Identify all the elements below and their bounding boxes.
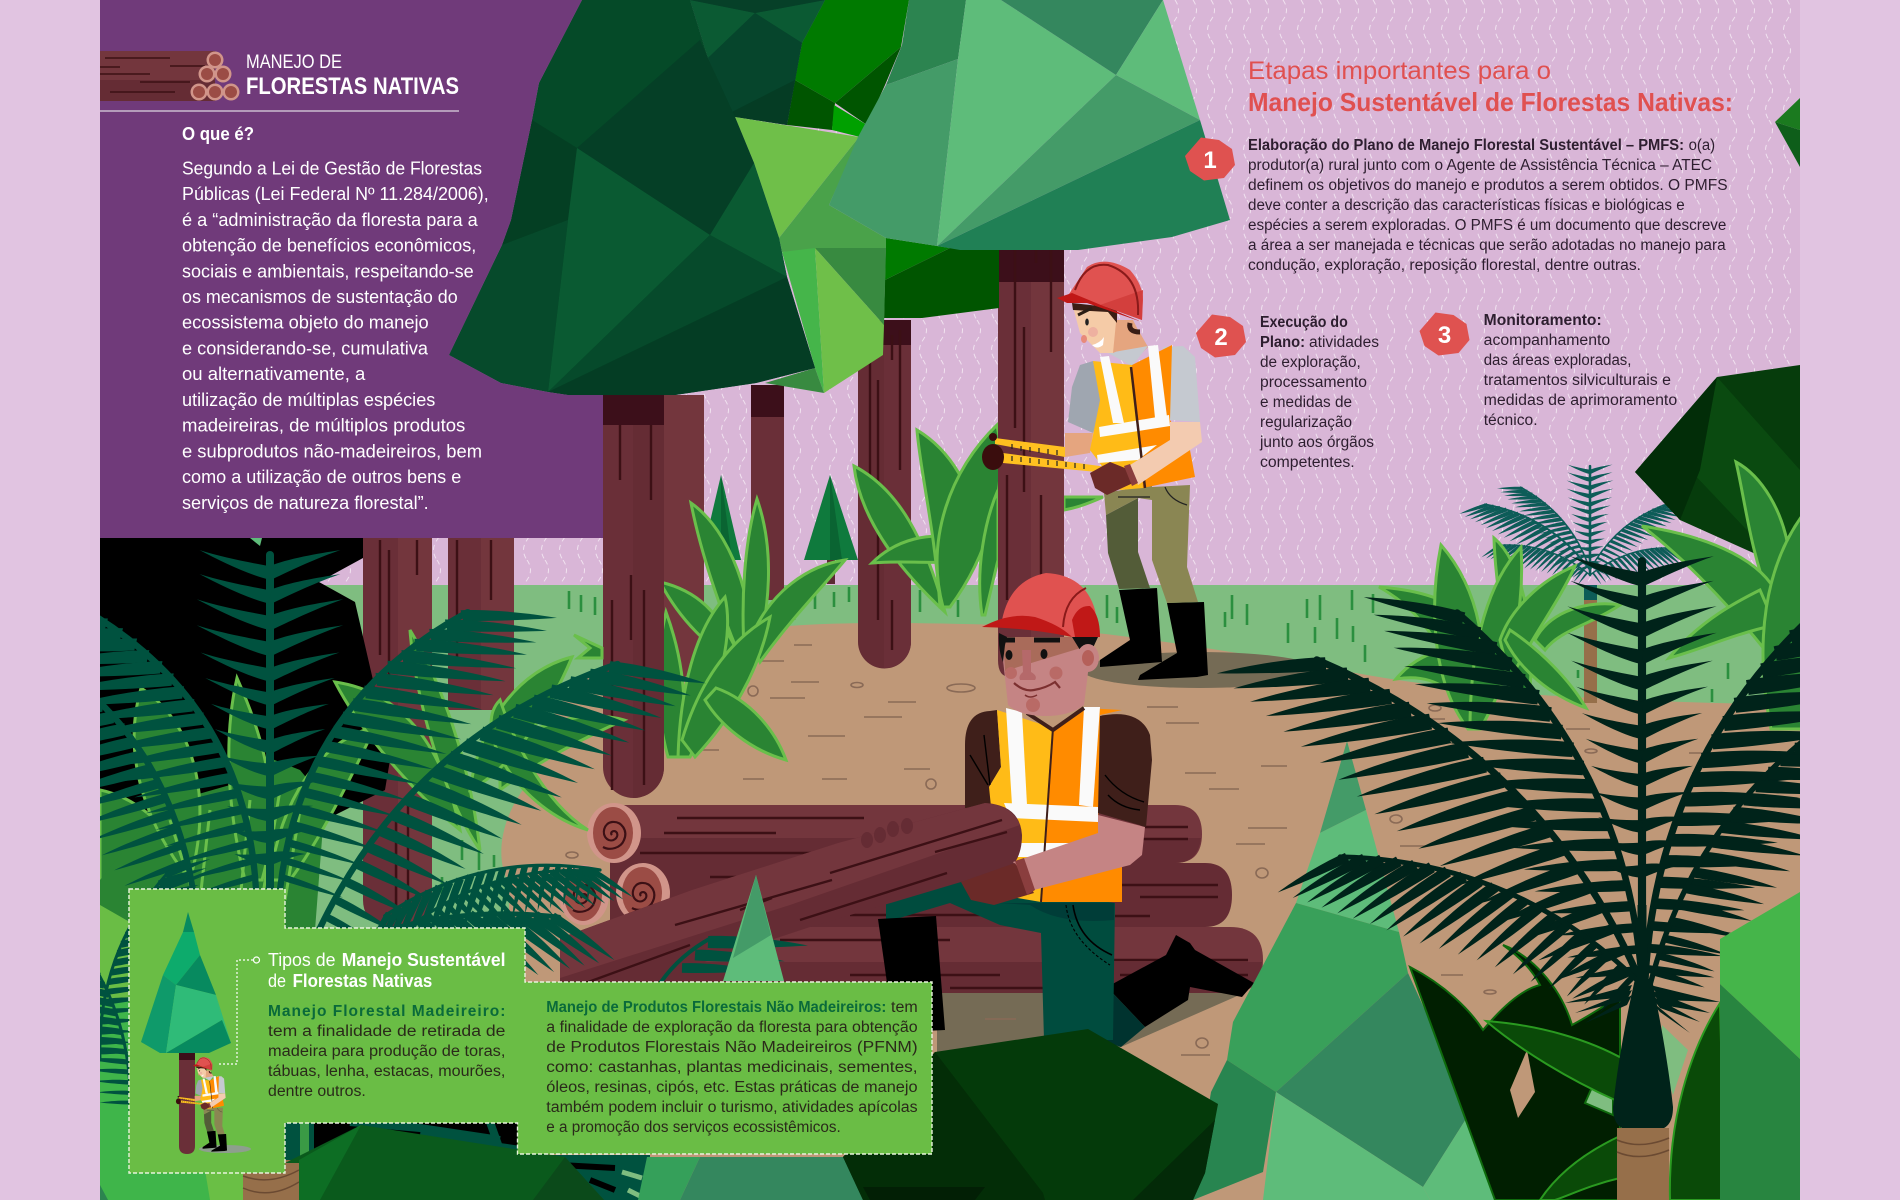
plant bottom right xyxy=(1670,1003,1725,1200)
trousers xyxy=(1104,485,1198,603)
header title: MANEJO DE xyxy=(246,52,342,73)
definition text: como a utilização de outros bens e xyxy=(182,467,461,487)
timber management text xyxy=(268,1003,505,1100)
green polygon tree right corner xyxy=(1720,892,1800,1200)
sleeve creases xyxy=(970,735,1144,810)
left sleeve xyxy=(1068,361,1103,433)
trousers xyxy=(886,880,1115,1040)
step 2 text: competentes. xyxy=(1260,454,1355,471)
definition text: sociais e ambientais, respeitando-se xyxy=(182,261,474,281)
cone tree center xyxy=(723,875,784,981)
non-timber management text: óleos, resinas, cipós, etc. Estas práticas de manejo xyxy=(546,1079,918,1096)
definition text: e subprodutos não-madeireiros, bem xyxy=(182,441,482,461)
non-timber management text: de Produtos Florestais Não Madeireiros (PFNM) xyxy=(546,1039,918,1056)
step 2 text: junto aos órgãos xyxy=(1259,434,1374,451)
badge 3 xyxy=(1420,312,1470,356)
badge 1: 1 xyxy=(1203,147,1217,174)
definition text: madeireiras, de múltiplos produtos xyxy=(182,416,465,436)
forearm xyxy=(1013,815,1145,890)
right sleeve xyxy=(1098,714,1152,827)
light tree bottom xyxy=(638,1157,865,1200)
back trunks left xyxy=(363,537,514,927)
step 1 text: definem os objetivos do manejo e produtos a serem obtidos. O PMFS xyxy=(1248,177,1728,194)
step 3 text: medidas de aprimoramento xyxy=(1484,392,1677,409)
box title xyxy=(268,950,506,991)
badge 1 xyxy=(1185,138,1235,180)
step 1 text xyxy=(1248,137,1728,274)
dark green tree bottom xyxy=(285,1125,604,1200)
worker ground shadow xyxy=(1082,652,1318,688)
timber management text: tem a finalidade de retirada de xyxy=(268,1023,505,1040)
left arm xyxy=(1065,433,1093,457)
definition text: Segundo a Lei de Gestão de Florestas xyxy=(182,158,482,178)
step 3 text xyxy=(1484,312,1677,429)
canopy: dark green tree xyxy=(449,0,815,395)
plants left xyxy=(100,630,624,1040)
definition text: e considerando-se, cumulativa xyxy=(182,338,429,358)
distant palm xyxy=(1458,463,1700,703)
vest xyxy=(989,707,1122,902)
definition text: ecossistema objeto do manejo xyxy=(182,313,429,333)
plant veins xyxy=(170,790,300,900)
step 2 text: de exploração, xyxy=(1260,354,1361,371)
box title: Manejo Sustentável xyxy=(342,950,506,970)
definition text xyxy=(182,158,489,513)
purple background panel xyxy=(100,0,603,538)
trunk: front xyxy=(603,395,664,798)
trunk: big xyxy=(998,250,1064,677)
grass tufts xyxy=(442,587,1728,897)
definition text: ou alternativamente, a xyxy=(182,364,366,384)
trunk: small xyxy=(751,385,784,600)
non-timber management text: também podem incluir o turismo, atividades apícolas xyxy=(546,1099,918,1116)
right fern xyxy=(1210,522,1900,1200)
non-timber management text xyxy=(546,999,918,1136)
panel: types of management xyxy=(129,889,932,1173)
neck xyxy=(1113,333,1148,363)
step 3 text: técnico. xyxy=(1484,412,1538,429)
definition text: os mecanismos de sustentação do xyxy=(182,287,458,307)
panel: what is it xyxy=(100,0,603,538)
trunk: medium xyxy=(858,320,911,668)
log end A xyxy=(587,803,641,863)
heading: o que é: O que é? xyxy=(182,124,254,144)
badge 3: 3 xyxy=(1438,322,1451,349)
header title: FLORESTAS NATIVAS xyxy=(246,73,459,100)
left fern xyxy=(0,544,712,1123)
step 1 text: o(a) xyxy=(1689,137,1715,154)
right arm xyxy=(1130,422,1202,485)
step 1 text: Elaboração do Plano de Manejo Florestal Sustentável – PMFS: xyxy=(1248,137,1684,154)
dark plant lower right xyxy=(1410,945,1625,1200)
plant right middle xyxy=(1379,538,1620,729)
bottom left greens xyxy=(100,905,260,1200)
log stack ground shadow xyxy=(937,993,1237,1052)
black tree xyxy=(100,538,390,814)
grass patch behind palm xyxy=(1660,1025,1688,1095)
step 1 text: deve conter a descrição das características físicas e biológicas e xyxy=(1248,197,1685,214)
step 1 text: produtor(a) rural junto com o Agente de Assistência Técnica – ATEC xyxy=(1248,157,1712,174)
steps heading xyxy=(1248,57,1733,117)
definition text: serviços de natureza florestal”. xyxy=(182,493,429,513)
helmet xyxy=(1057,262,1143,322)
small conifers xyxy=(701,475,858,584)
plant behind trunks xyxy=(658,499,845,760)
kneeling boot xyxy=(1107,935,1254,1027)
canopy: dark teal back tree xyxy=(690,0,825,125)
left glove xyxy=(982,433,1004,470)
definition text: Públicas (Lei Federal Nº 11.284/2006), xyxy=(182,184,489,204)
step 2 text: Plano: xyxy=(1260,334,1305,351)
head xyxy=(999,633,1099,716)
panel: steps xyxy=(1185,57,1733,471)
step 3 text: tratamentos silviculturais e xyxy=(1484,372,1671,389)
step 2 text xyxy=(1259,314,1379,471)
non-timber management text: e a promoção dos serviços ecossistêmicos. xyxy=(546,1119,841,1136)
step 3 text: Monitoramento: xyxy=(1484,312,1602,329)
glove xyxy=(961,858,1035,905)
steps heading: Etapas importantes para o xyxy=(1248,57,1551,85)
measuring tape xyxy=(995,438,1107,472)
definition text: é a “administração da floresta para a xyxy=(182,210,479,230)
non-timber management text: Manejo de Produtos Florestais Não Madeireiros: xyxy=(546,999,886,1016)
boots xyxy=(1100,588,1208,680)
header divider xyxy=(100,110,459,112)
step 3 text: das áreas exploradas, xyxy=(1484,352,1632,369)
box title: de xyxy=(268,971,286,991)
canopy: bright green tree xyxy=(787,0,999,318)
definition text: obtenção de benefícios econômicos, xyxy=(182,236,476,256)
step 2 text: Execução do xyxy=(1260,314,1348,331)
badge 2 xyxy=(1196,314,1246,358)
plant far right xyxy=(1642,462,1815,729)
box title: Tipos de xyxy=(268,950,336,970)
grass field xyxy=(315,585,1764,928)
vest xyxy=(1090,345,1195,490)
step 2 text: atividades xyxy=(1309,334,1379,351)
big green tree lower right xyxy=(1193,741,1495,1200)
log end B left xyxy=(559,865,609,925)
non-timber management text: como: castanhas, plantas medicinais, sementes, xyxy=(546,1059,918,1076)
timber management text: tábuas, lenha, estacas, mourões, xyxy=(268,1063,505,1080)
header title xyxy=(246,52,459,100)
carried log xyxy=(560,803,1022,1010)
definition text: utilização de múltiplas espécies xyxy=(182,390,435,410)
step 1 text: a área a ser manejada e técnicas que serão adotadas no manejo para xyxy=(1248,237,1726,254)
front boot xyxy=(878,916,945,1032)
badge 2: 2 xyxy=(1214,324,1228,351)
log B xyxy=(610,863,1232,927)
ground marks xyxy=(566,645,1707,1055)
dark green tree bottom center xyxy=(843,1029,1218,1200)
non-timber management text: tem xyxy=(891,999,918,1016)
step 3 text: acompanhamento xyxy=(1484,332,1610,349)
icon: log pile header xyxy=(100,51,240,101)
small worker shadow xyxy=(199,1145,251,1153)
log stack xyxy=(559,803,1263,993)
dark tree right xyxy=(1635,365,1800,553)
collar xyxy=(1108,346,1148,366)
step 2 text: regularização xyxy=(1260,414,1352,431)
lower shin xyxy=(1100,987,1145,1047)
step 1 text: condução, exploração, reposição florestal, dentre outras. xyxy=(1248,257,1641,274)
wood trunk bottom xyxy=(243,1160,299,1200)
green stepped box xyxy=(129,889,932,1173)
front worker xyxy=(560,573,1254,1047)
log C xyxy=(600,927,1263,993)
icon: small tree xyxy=(141,912,231,1154)
dotted connector xyxy=(219,957,260,1064)
step 1 text: espécies a serem exploradas. O PMFS é um documento que descreve xyxy=(1248,217,1726,234)
non-timber management text: a finalidade de exploração da floresta para obtenção xyxy=(546,1019,918,1036)
timber management text: dentre outros. xyxy=(268,1083,366,1100)
trunk: behind front xyxy=(664,395,704,690)
right glove xyxy=(1090,462,1138,495)
black gap under box xyxy=(285,1120,650,1200)
small worker xyxy=(176,1057,227,1152)
sky xyxy=(320,0,1800,585)
canopy: front light tree xyxy=(829,0,1230,250)
timber management text: Manejo Florestal Madeireiro: xyxy=(268,1003,505,1020)
plant behind big trunk xyxy=(854,425,1103,615)
right sleeve xyxy=(1163,346,1200,422)
timber management text: madeira para produção de toras, xyxy=(268,1043,505,1060)
steps heading: Manejo Sustentável de Florestas Nativas: xyxy=(1248,87,1733,117)
box title: Florestas Nativas xyxy=(293,971,432,991)
canopy: light green tree xyxy=(735,117,886,393)
worker with measuring tape xyxy=(982,262,1208,680)
step 2 text: processamento xyxy=(1260,374,1367,391)
step 2 text: e medidas de xyxy=(1260,394,1352,411)
left sleeve xyxy=(965,710,1001,808)
small leaf polygon right edge xyxy=(1775,98,1800,167)
head xyxy=(1072,303,1143,353)
helmet xyxy=(982,573,1100,637)
dirt ground xyxy=(501,623,1800,1200)
log A xyxy=(610,805,1202,863)
log end B right xyxy=(616,863,670,923)
small frond over logs xyxy=(661,935,808,982)
